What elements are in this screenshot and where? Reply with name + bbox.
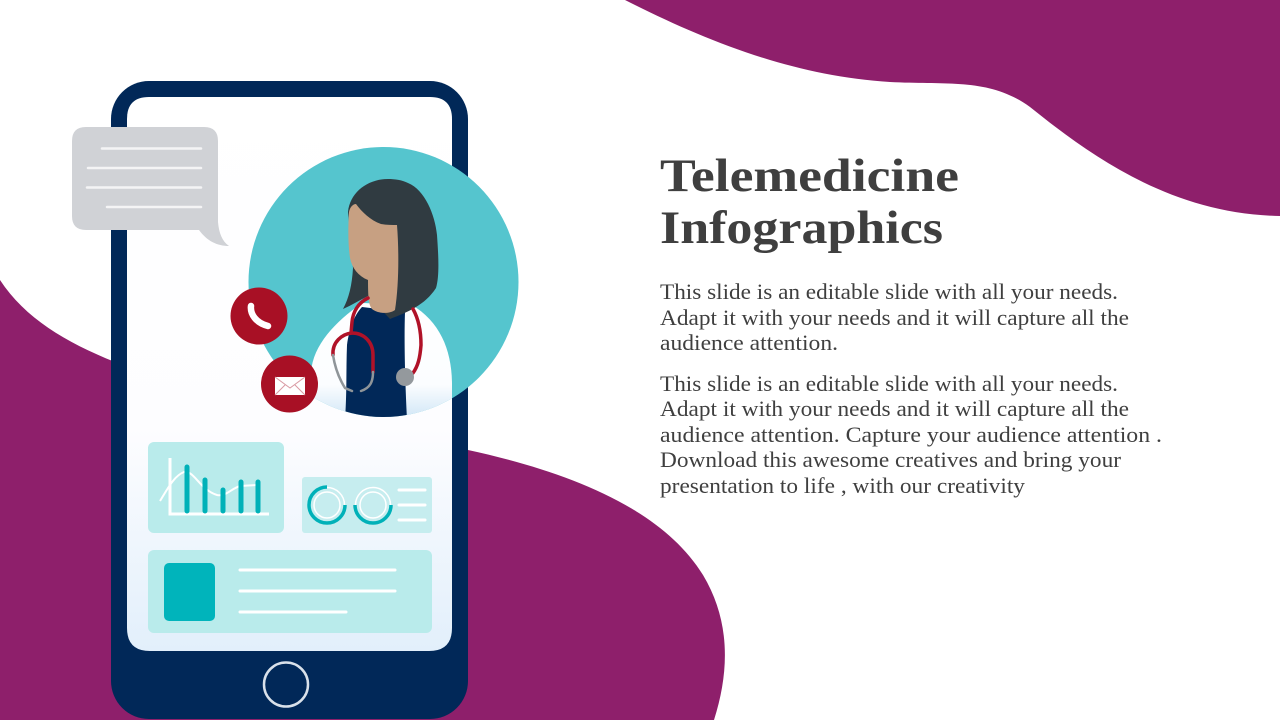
phone screen <box>127 97 452 651</box>
text block: first paragraph: Adapt it with your needs and it will capture all the <box>660 305 1129 330</box>
icon: phone call <box>230 288 288 344</box>
doctor illustration <box>248 147 518 420</box>
text block: second paragraph: audience attention. Capture your audience attention . <box>660 422 1162 447</box>
background shape: top right purple wave <box>625 0 1280 216</box>
text block: first paragraph: This slide is an editable slide with all your needs. <box>660 279 1118 304</box>
teal circle <box>248 147 518 417</box>
text block: second paragraph: Download this awesome creatives and bring your <box>660 447 1122 472</box>
text block: second paragraph: This slide is an editable slide with all your needs. <box>660 371 1118 396</box>
title <box>660 150 959 254</box>
background shape: bottom left purple wave <box>0 280 725 720</box>
panel: profile card <box>148 550 432 633</box>
navy shirt <box>345 307 407 420</box>
stethoscope chest piece <box>396 368 414 386</box>
title: Telemedicine <box>660 150 959 202</box>
title: Infographics <box>660 202 943 254</box>
stethoscope <box>333 298 421 391</box>
smartphone illustration <box>72 81 518 719</box>
text block: second paragraph: Adapt it with your needs and it will capture all the <box>660 396 1129 421</box>
panel: donut charts card <box>302 477 432 533</box>
phone body <box>111 81 468 719</box>
face and neck <box>348 204 398 313</box>
text block: second paragraph: presentation to life , with our creativity <box>660 473 1025 498</box>
speech bubble <box>72 127 229 246</box>
hair <box>343 179 438 319</box>
white coat <box>311 303 452 420</box>
text block: first paragraph <box>660 279 1129 355</box>
home button <box>264 662 308 706</box>
text block: first paragraph: audience attention. <box>660 330 838 355</box>
text block: second paragraph <box>660 371 1162 498</box>
icon: envelope <box>261 356 318 412</box>
panel: bar chart card <box>148 442 284 533</box>
